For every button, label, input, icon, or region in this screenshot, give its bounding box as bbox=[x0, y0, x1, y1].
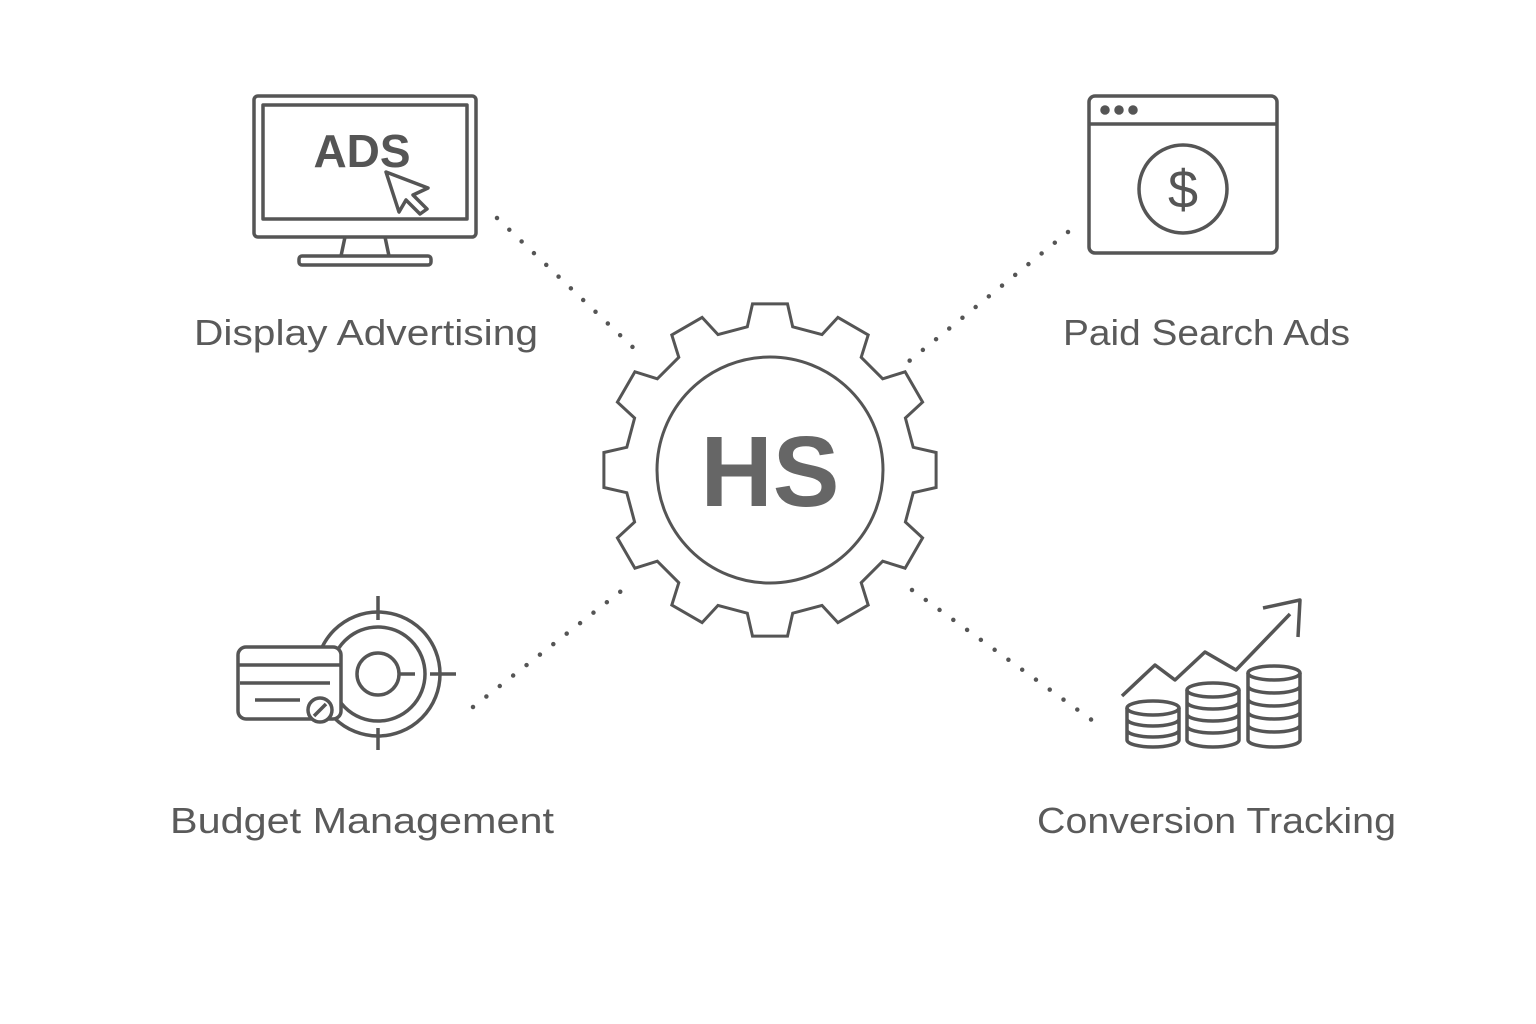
icon: paid search browser bbox=[1089, 96, 1277, 253]
label: budget management: Budget Management bbox=[170, 800, 554, 841]
label: paid search ads: Paid Search Ads bbox=[1063, 312, 1350, 353]
icon: ads monitor: ADS bbox=[313, 125, 411, 177]
hub gear bbox=[604, 304, 936, 636]
hub label: HS bbox=[701, 416, 839, 528]
connector: display to hub bbox=[473, 218, 1100, 726]
icon: ads monitor bbox=[254, 96, 476, 265]
icon: paid search browser: $ bbox=[1168, 160, 1198, 220]
label: display advertising: Display Advertising bbox=[194, 312, 538, 353]
icon: budget card and target bbox=[238, 596, 456, 750]
label: conversion tracking: Conversion Tracking bbox=[1037, 800, 1396, 841]
icon: conversion coins and arrow bbox=[1122, 600, 1300, 747]
